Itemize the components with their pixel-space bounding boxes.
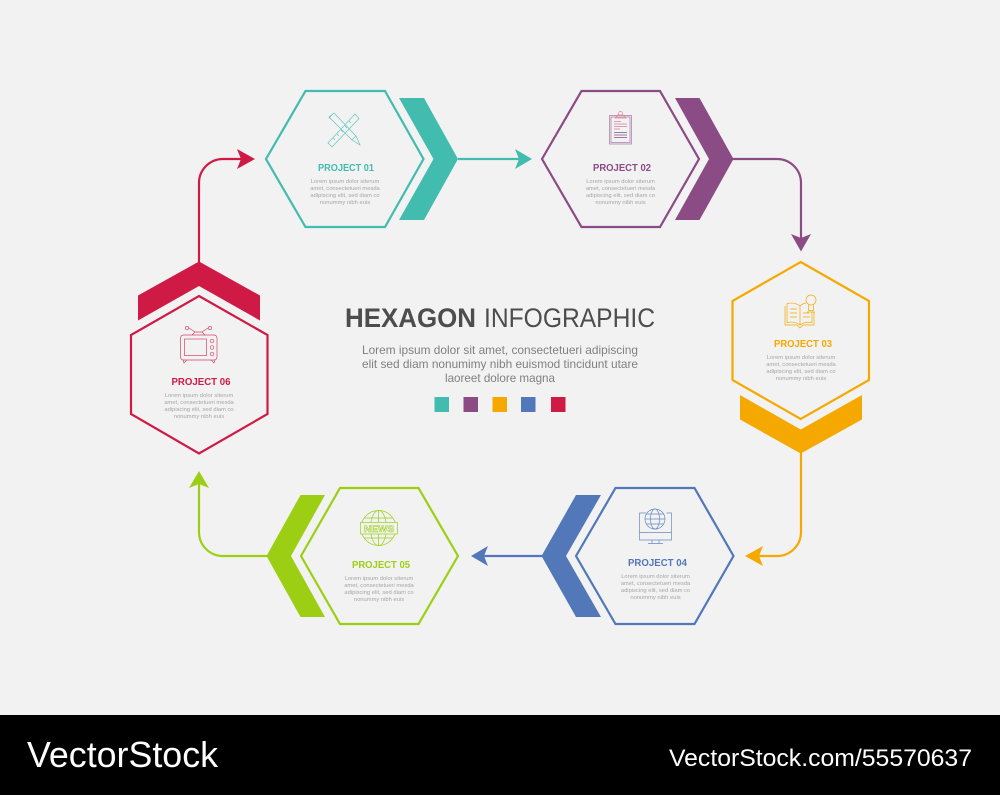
hexagon 05 outline: [301, 488, 458, 624]
text: project 01 description: adipiscing elit, sed diam co: [310, 193, 380, 199]
heading: project 04: PROJECT 04: [628, 558, 687, 569]
text: project 02 description: amet, consectetueri mesda: [586, 186, 656, 192]
text: central description: laoreet dolore magna: [445, 371, 555, 385]
hexagon 06 outline: [131, 296, 268, 454]
heading: project 05: PROJECT 05: [352, 560, 410, 571]
text: project 06 description: adipiscing elit, sed diam co: [164, 407, 234, 413]
text: project 05 description: amet, consectetueri mesda: [344, 583, 415, 589]
title: [345, 303, 655, 333]
text: project 06 description: nonummy nibh euis: [174, 414, 224, 420]
chevron 02: [675, 98, 734, 220]
hexagon 01 outline: [266, 91, 424, 227]
footer bar: [0, 715, 1000, 795]
text: project 01 description: amet, consectetueri mesda: [310, 186, 381, 192]
text: project 04 description: nonummy nibh euis: [630, 595, 681, 601]
panel: project 06: [131, 149, 268, 454]
legend colour squares: [434, 397, 566, 412]
panel: project 02: [542, 91, 811, 252]
text: project 04 description: adipiscing elit, sed diam co: [621, 588, 690, 594]
heading: project 06: PROJECT 06: [172, 377, 231, 388]
text: project 01 description: nonummy nibh euis: [320, 200, 370, 206]
text: project 05 description: nonummy nibh euis: [354, 597, 404, 603]
arrow 02 to 03: [733, 159, 811, 252]
text: central description: Lorem ipsum dolor sit amet, consectetueri adipiscing: [362, 343, 638, 357]
panel: project 05: [189, 471, 458, 624]
text: project 05 description: Lorem ipsum dolor siterum: [345, 576, 413, 582]
icon: television: [180, 326, 217, 363]
chevron 03: [740, 395, 862, 454]
title: HEXAGON: [345, 303, 476, 333]
hexagon 04 outline: [576, 488, 734, 624]
text: project 02 description: adipiscing elit, sed diam co: [586, 193, 655, 199]
text: central description: elit sed diam nonumimy nibh euismod tincidunt utare: [362, 357, 638, 371]
hexagon 03 outline: [732, 262, 869, 419]
text: project 03 description: adipiscing elit, sed diam co: [766, 369, 836, 375]
heading: project 03: PROJECT 03: [774, 339, 832, 350]
icon: monitor with globe: [640, 509, 672, 544]
panel: project 01: [266, 91, 532, 227]
footer logo text: VectorStock: [27, 734, 219, 775]
footer image id: VectorStock.com/55570637: [669, 745, 972, 772]
text: project 02 description: Lorem ipsum dolor siterum: [586, 179, 655, 185]
text: project 02 description: nonummy nibh euis: [595, 200, 646, 206]
arrow 03 to 04: [745, 453, 801, 566]
chevron 01: [399, 98, 458, 220]
chevron 06: [138, 262, 260, 320]
title: INFOGRAPHIC: [484, 303, 655, 333]
icon: news globe: NEWS: [364, 524, 394, 534]
arrow 04 to 05: [471, 546, 542, 566]
arrow 01 to 02: [458, 149, 532, 169]
text: project 06 description: Lorem ipsum dolor siterum: [165, 393, 233, 399]
icon: news globe: [360, 510, 398, 546]
heading: project 01: PROJECT 01: [318, 163, 374, 174]
heading: project 02: PROJECT 02: [593, 163, 651, 174]
arrow 06 to 01: [199, 149, 255, 262]
hexagon 02 outline: [542, 91, 699, 227]
panel: project 04: [471, 488, 734, 624]
text: project 03 description: nonummy nibh euis: [776, 376, 826, 382]
text: central description: [362, 343, 638, 385]
icon: clipboard: [610, 112, 632, 144]
text: project 03 description: amet, consectetueri mesda: [766, 362, 837, 368]
text: project 03 description: Lorem ipsum dolor siterum: [767, 355, 835, 361]
chevron 04: [542, 495, 601, 617]
text: project 04 description: amet, consectetueri mesda: [621, 581, 691, 587]
arrow 05 to 06: [189, 471, 267, 556]
panel: project 03: [732, 262, 869, 566]
text: project 05 description: adipiscing elit, sed diam co: [344, 590, 414, 596]
text: project 06 description: amet, consectetueri mesda: [164, 400, 235, 406]
icon: ruler and pencil: [328, 113, 360, 147]
text: project 01 description: Lorem ipsum dolor siterum: [311, 179, 379, 185]
chevron 05: [266, 495, 325, 617]
icon: book and bulb: [785, 295, 816, 328]
text: project 04 description: Lorem ipsum dolor siterum: [621, 574, 690, 580]
